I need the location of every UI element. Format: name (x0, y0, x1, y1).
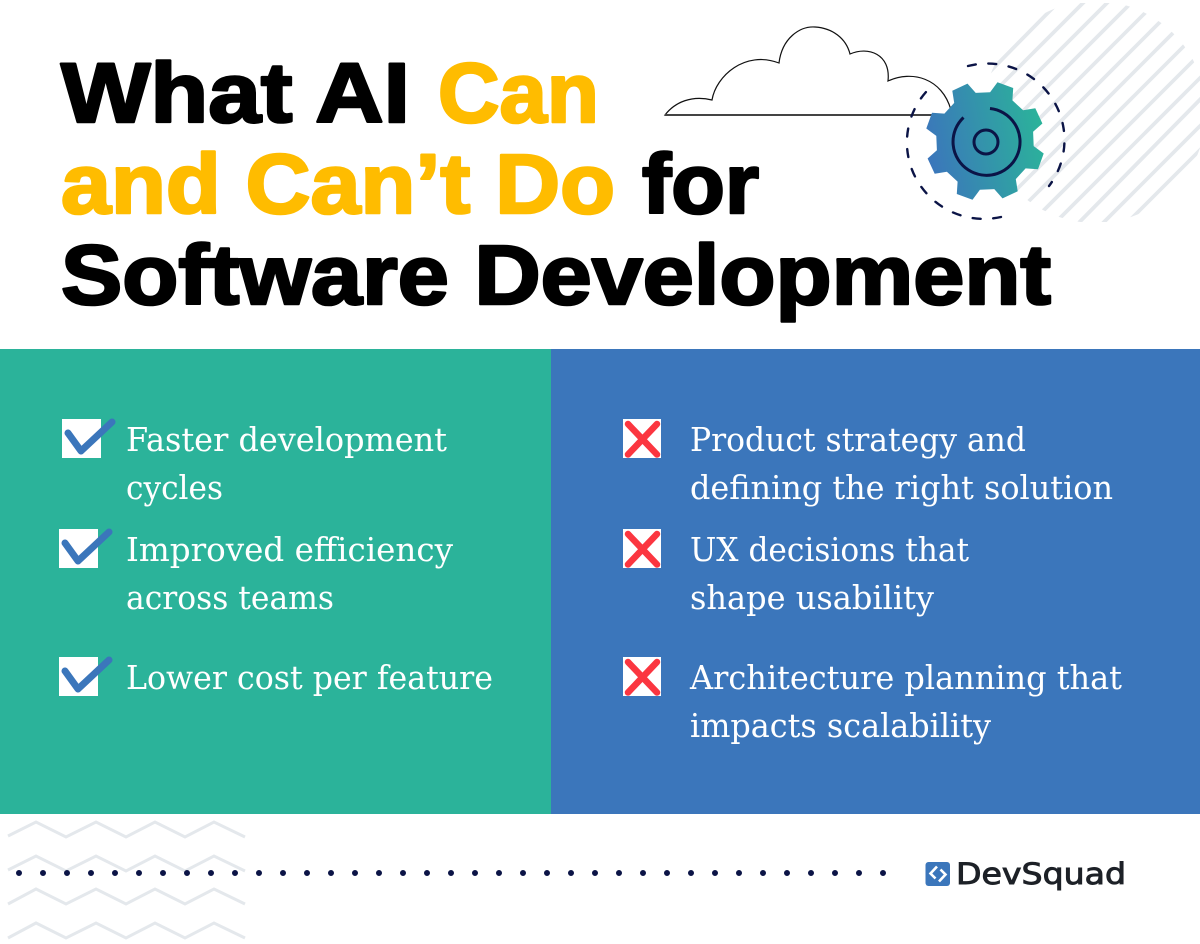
title: for (642, 137, 759, 231)
item: improved efficiency: Improved efficiency (126, 530, 453, 569)
item: architecture planning: Architecture planning that (689, 658, 1122, 697)
item: architecture planning (623, 657, 1122, 745)
item: UX decisions (623, 529, 969, 617)
item: architecture planning: impacts scalability (690, 706, 991, 745)
title: Software Development (61, 228, 1051, 322)
item: product strategy (623, 419, 1113, 507)
title: and Can’t Do (61, 137, 615, 231)
dotted line (19, 870, 885, 876)
item: product strategy: defining the right solution (690, 468, 1113, 507)
icon: cloud outline (665, 27, 951, 115)
item: faster development cycles: Faster development (126, 420, 447, 459)
panel: what AI can do (0, 349, 551, 814)
item: improved efficiency (59, 529, 453, 617)
decorative striped circle (991, 3, 1200, 222)
icon: gear with dashed ring (907, 64, 1064, 219)
item: faster development cycles (62, 419, 447, 507)
item: lower cost per feature: Lower cost per feature (126, 658, 493, 697)
title: Can (438, 46, 599, 140)
logo: DevSquad: DevSquad (956, 857, 1126, 891)
item: product strategy: Product strategy and (690, 420, 1026, 459)
panel: what AI can't do (551, 349, 1200, 814)
item: UX decisions: UX decisions that (690, 530, 969, 569)
item: UX decisions: shape usability (690, 578, 934, 617)
title (61, 46, 1051, 322)
title: What AI (61, 46, 410, 140)
decorative zigzag lines (8, 822, 245, 938)
item: faster development cycles: cycles (126, 468, 223, 507)
cloud baseline (665, 114, 948, 116)
item: improved efficiency: across teams (126, 578, 334, 617)
